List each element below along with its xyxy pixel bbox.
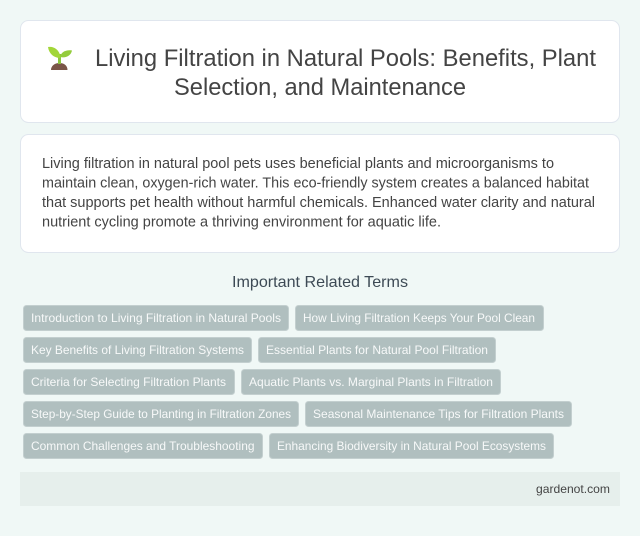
description text: [42, 156, 595, 230]
tag: criteria: Criteria for Selecting Filtration Plants: [31, 375, 226, 389]
tag: how it works: [296, 306, 544, 330]
tag: seasonal maintenance: [306, 402, 572, 426]
description text: Living filtration in natural pool pets uses beneficial plants and microorganisms to: [42, 156, 554, 172]
description text: that supports pet health without harmful chemicals. Enhanced water clarity and natural: [42, 195, 595, 211]
tag: planting guide: [24, 402, 298, 426]
tag: troubleshooting: Common Challenges and Troubleshooting: [31, 439, 254, 453]
section heading: Important Related Terms: [232, 274, 408, 291]
tag: key benefits: [24, 338, 252, 362]
tag: key benefits: Key Benefits of Living Filtration Systems: [31, 343, 244, 357]
header card: [20, 20, 620, 122]
tag: biodiversity: Enhancing Biodiversity in Natural Pool Ecosystems: [277, 439, 546, 453]
icon: seedling: [48, 47, 72, 70]
tag: how it works: How Living Filtration Keeps Your Pool Clean: [303, 311, 535, 325]
description text: maintain clean, oxygen-rich water. This eco-friendly system creates a balanced habitat: [42, 176, 589, 192]
tag list: [24, 306, 572, 458]
tag: essential plants: Essential Plants for Natural Pool Filtration: [266, 343, 488, 357]
tag: aquatic vs marginal: Aquatic Plants vs. Marginal Plants in Filtration: [249, 375, 493, 389]
tag: introduction: Introduction to Living Filtration in Natural Pools: [31, 311, 281, 325]
tag: introduction: [24, 306, 288, 330]
tag: seasonal maintenance: Seasonal Maintenance Tips for Filtration Plants: [313, 407, 564, 421]
title: Living Filtration in Natural Pools: Benefits, Plant: [95, 45, 596, 72]
tag: aquatic vs marginal: [242, 370, 500, 394]
tag: biodiversity: [270, 434, 554, 458]
footer bar: [20, 472, 620, 506]
tag: criteria: [24, 370, 234, 394]
description card: [20, 134, 620, 252]
tag: troubleshooting: [24, 434, 262, 458]
tag: planting guide: Step-by-Step Guide to Planting in Filtration Zones: [31, 407, 291, 421]
tag: essential plants: [258, 338, 496, 362]
description text: nutrient cycling promote a thriving environment for aquatic life.: [42, 214, 441, 230]
title: [95, 45, 596, 101]
title: Selection, and Maintenance: [174, 74, 466, 101]
footer text: gardenot.com: [536, 482, 610, 496]
